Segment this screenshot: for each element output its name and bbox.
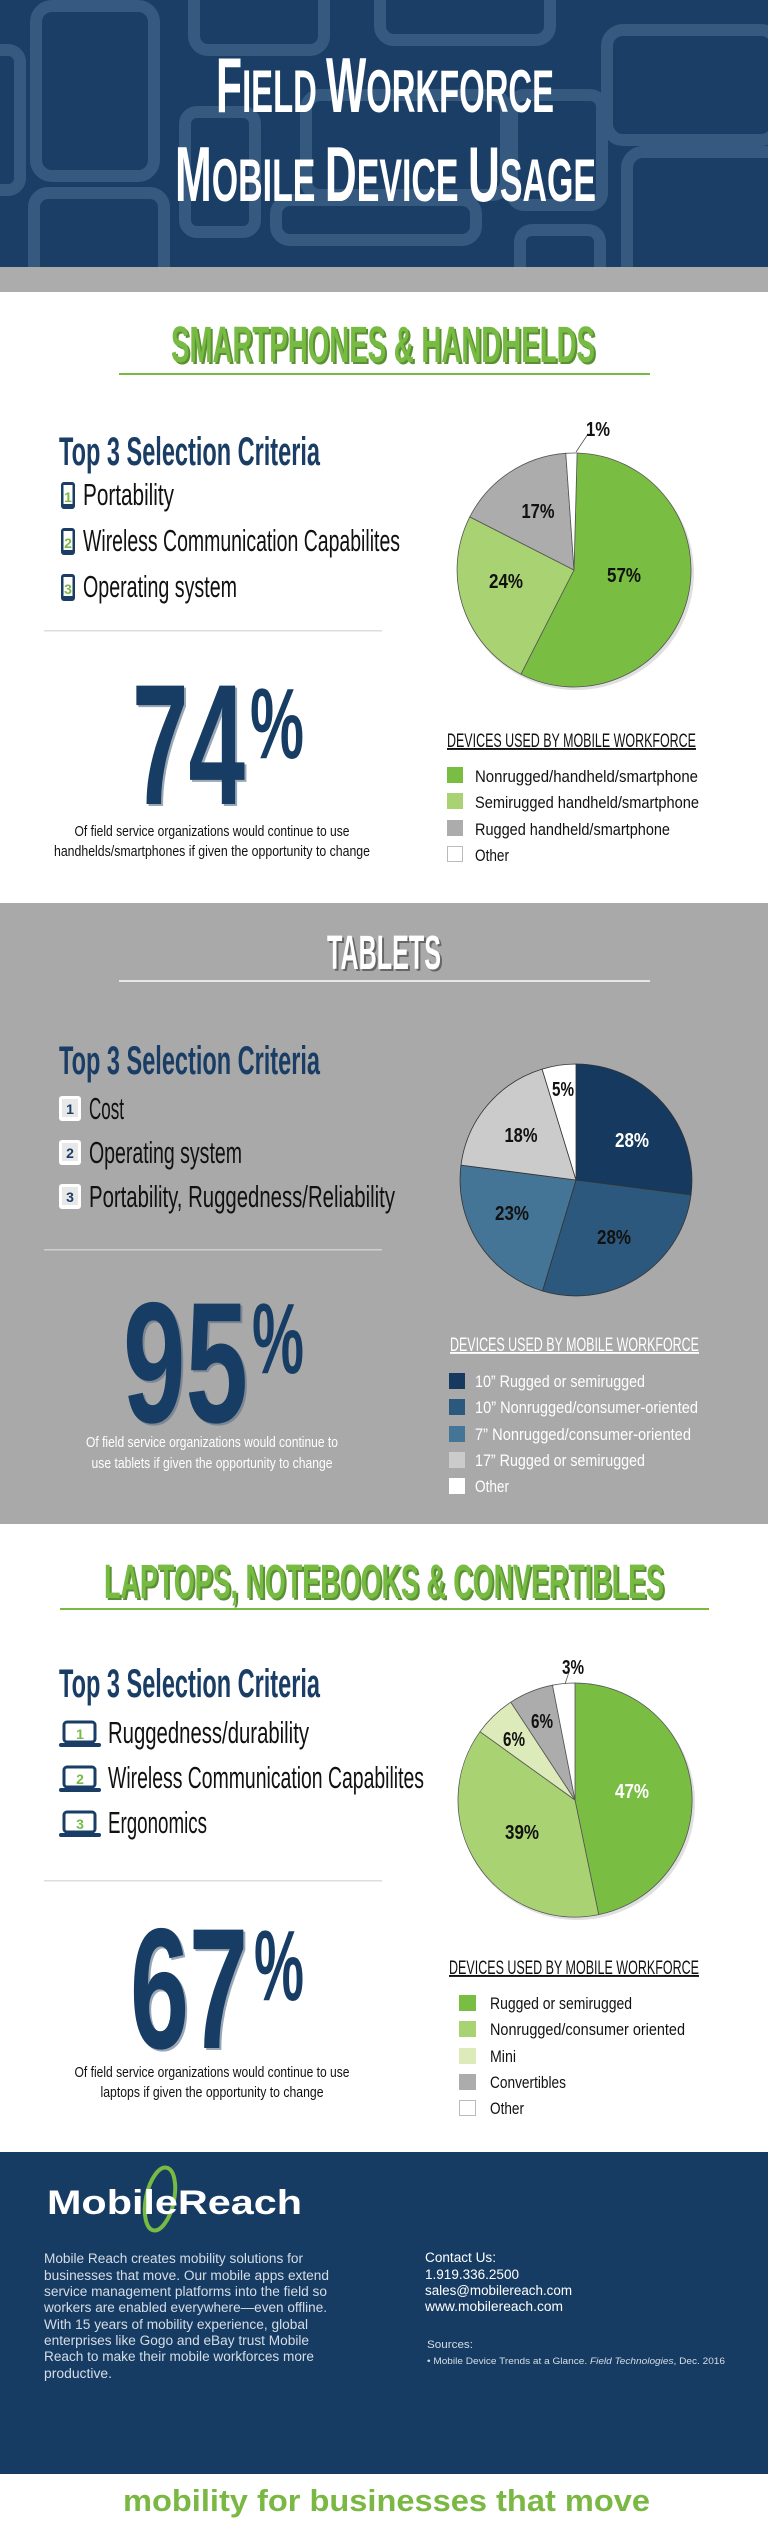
icon: laptop 1: 1 — [76, 1726, 84, 1742]
legend: tablets: 10” Nonrugged/consumer-oriented — [475, 1398, 698, 1417]
stat: 67%: 67 — [132, 1895, 250, 2087]
panel: tablet criteria: Operating system — [89, 1135, 242, 1170]
panel: tablet criteria — [59, 1039, 395, 1214]
legend: smartphones — [447, 731, 699, 865]
stat: 95%: 95 — [125, 1269, 250, 1461]
legend: laptops: Other — [490, 2099, 524, 2118]
pie chart: laptops — [458, 1657, 695, 1920]
title — [175, 41, 596, 218]
icon: laptop 2: 2 — [76, 1771, 84, 1787]
logo: MobileReach — [47, 2165, 302, 2233]
title: FIELD WORKFORCE — [216, 41, 554, 129]
legend: smartphones: Semirugged handheld/smartphone — [475, 793, 699, 812]
pie chart: smartphones: 24% — [489, 571, 523, 593]
legend: laptops: Rugged or semirugged — [490, 1994, 632, 2013]
legend: tablets: 7” Nonrugged/consumer-oriented — [475, 1425, 691, 1444]
pie chart: tablets: 28% — [597, 1227, 631, 1249]
text: about: Mobile Reach creates mobility solutions for — [44, 2251, 303, 2266]
footer panel — [0, 2152, 768, 2474]
header banner — [0, 0, 768, 292]
stat: 95%: % — [252, 1283, 304, 1395]
icon: phone 3 — [61, 574, 75, 601]
pie chart: laptops: 3% — [562, 1657, 584, 1679]
icon: laptop 3: 3 — [76, 1816, 84, 1832]
stat: 67%: laptops if given the opportunity to change — [100, 2084, 324, 2101]
panel: laptop criteria: Top 3 Selection Criteria — [59, 1662, 320, 1706]
panel: tablet criteria: Portability, Ruggedness/Reliability — [89, 1179, 395, 1214]
pie chart: laptops: 6% — [531, 1711, 553, 1733]
text: contact — [424, 2250, 572, 2314]
panel: smartphone criteria: Top 3 Selection Criteria — [59, 430, 320, 474]
icon: laptop 1 — [59, 1722, 101, 1747]
pie chart: smartphones: 17% — [522, 501, 555, 523]
pie chart: tablets: 18% — [504, 1125, 538, 1147]
heading: tablets: TABLETS — [329, 929, 443, 982]
icon: phone 1 — [61, 482, 75, 509]
legend: laptops: Nonrugged/consumer oriented — [490, 2020, 685, 2039]
panel: smartphone criteria — [59, 430, 400, 604]
icon: tablet 2: 2 — [66, 1145, 74, 1161]
panel: smartphone criteria: Operating system — [83, 569, 237, 604]
pie chart: tablets: 23% — [495, 1203, 529, 1225]
heading: tablets — [119, 927, 650, 982]
panel: laptop criteria: Ruggedness/durability — [108, 1715, 309, 1750]
legend: tablets: 17” Rugged or semirugged — [475, 1451, 645, 1470]
stat: 67% — [74, 1893, 350, 2101]
stat: 95%: use tablets if given the opportunity to change — [92, 1455, 332, 1472]
stat: 74%: % — [250, 668, 304, 780]
pie chart: laptops: 47% — [615, 1781, 649, 1803]
panel: smartphone criteria: Portability — [83, 477, 174, 512]
text: contact: 1.919.336.2500 — [425, 2267, 519, 2282]
panel: laptop criteria — [59, 1662, 424, 1840]
legend: tablets: Other — [475, 1477, 509, 1496]
stat: 95%: Of field service organizations would continue to — [86, 1434, 338, 1451]
icon: phone 2 — [61, 528, 75, 555]
legend: smartphones: Other — [475, 846, 509, 865]
legend: smartphones: Rugged handheld/smartphone — [475, 820, 670, 839]
text: about: Reach to make their mobile workforces more — [44, 2349, 314, 2364]
legend: tablets — [449, 1335, 699, 1496]
pie chart: smartphones: 57% — [607, 565, 641, 587]
stat: 74%: 74 — [132, 649, 245, 841]
text: about: enterprises like Gogo and eBay trust Mobile — [44, 2333, 309, 2348]
text: contact: Contact Us: — [425, 2250, 496, 2265]
icon: phone 1: 1 — [64, 489, 72, 505]
pie chart: smartphones — [457, 419, 694, 690]
title: MOBILE DEVICE USAGE — [175, 130, 596, 218]
text: about: With 15 years of mobility experience, global — [44, 2317, 308, 2332]
text: contact: sales@mobilereach.com — [425, 2283, 572, 2298]
tagline: mobility for businesses that move — [123, 2483, 650, 2518]
heading: tablets: TABLETS — [327, 927, 441, 980]
stat: 67%: 67 — [130, 1893, 248, 2085]
text: sources: Sources: — [427, 2339, 473, 2351]
stat: 67%: % — [254, 1910, 304, 2022]
stat: 67%: Of field service organizations would continue to use — [74, 2064, 350, 2081]
legend: laptops — [449, 1958, 699, 2118]
panel: smartphone criteria: Wireless Communication Capabilites — [83, 523, 400, 558]
text: about: productive. — [44, 2366, 112, 2381]
pie chart: tablets: 28% — [615, 1130, 649, 1152]
pie chart: smartphones: 1% — [586, 419, 610, 441]
icon: tablet 1: 1 — [66, 1101, 74, 1117]
stat: 74% — [54, 649, 370, 860]
panel: laptop criteria: Wireless Communication Capabilites — [108, 1760, 424, 1795]
text: about: businesses that move. Our mobile apps extend — [44, 2268, 329, 2283]
legend: laptops: Convertibles — [490, 2073, 566, 2092]
stat: 74%: handhelds/smartphones if given the opportunity to change — [54, 843, 370, 860]
panel: tablet criteria: Cost — [89, 1091, 124, 1126]
panel: tablet criteria: Top 3 Selection Criteria — [59, 1039, 320, 1083]
icon: laptop 2 — [59, 1767, 101, 1792]
logo: MobileReach: MobileReach — [47, 2184, 302, 2222]
panel: laptop criteria: Ergonomics — [108, 1805, 207, 1840]
legend: tablets: 10” Rugged or semirugged — [475, 1372, 645, 1391]
text: about — [43, 2251, 329, 2381]
stat: 74%: 74 — [134, 651, 247, 843]
text: sources — [427, 2339, 725, 2366]
text: about: workers are enabled everywhere—even offline. — [43, 2300, 327, 2315]
icon: laptop 3 — [59, 1812, 101, 1837]
icon: tablet 1 — [59, 1096, 81, 1121]
legend: smartphones: Nonrugged/handheld/smartphone — [475, 767, 698, 786]
text: contact: www.mobilereach.com — [424, 2299, 563, 2314]
icon: phone 3: 3 — [64, 581, 72, 597]
pie chart: laptops: 39% — [505, 1822, 539, 1844]
pie chart: laptops: 6% — [503, 1729, 525, 1751]
legend: laptops: Mini — [490, 2047, 516, 2066]
panel: tablets background — [0, 903, 768, 1524]
stat: 74%: Of field service organizations would continue to use — [74, 823, 350, 840]
pie chart: tablets: 5% — [552, 1079, 574, 1101]
icon: tablet 3: 3 — [66, 1189, 74, 1205]
pie chart: tablets — [460, 1064, 692, 1296]
icon: phone 2: 2 — [64, 535, 72, 551]
icon: tablet 2 — [59, 1140, 81, 1165]
text: about: service management platforms into the field so — [44, 2284, 327, 2299]
stat: 95%: 95 — [123, 1267, 248, 1459]
text: sources: • Mobile Device Trends at a Glance. Field Technologies , Dec. 2016 — [427, 2356, 725, 2366]
icon: tablet 3 — [59, 1184, 81, 1209]
